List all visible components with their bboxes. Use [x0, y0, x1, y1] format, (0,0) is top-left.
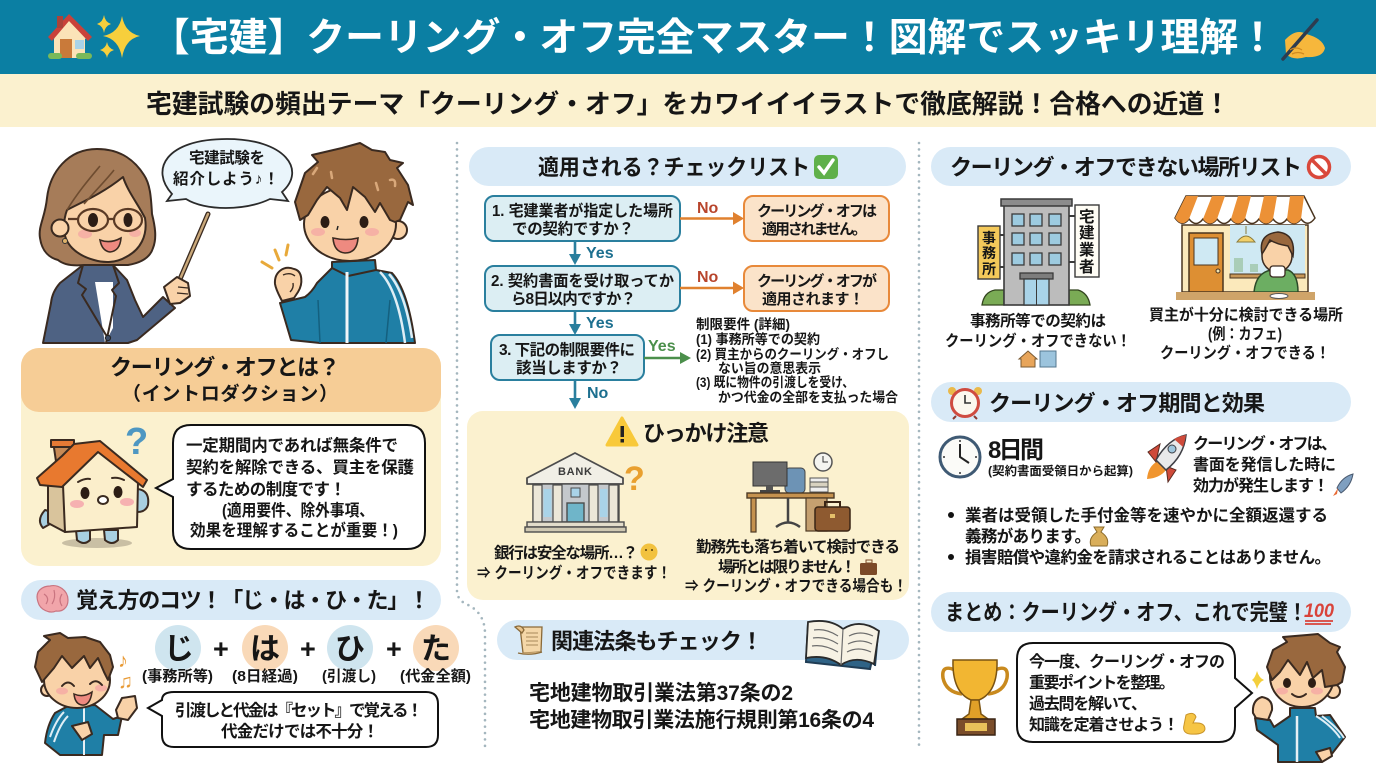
text: cafe can cool off: 買主が十分に検討できる場所 — [1149, 305, 1343, 324]
dotted column dividers — [457, 143, 919, 747]
text: workplace trap: ⇒ クーリング・オフできる場合も！ — [685, 576, 907, 595]
icon: house — [48, 14, 92, 59]
arrow labels: No — [697, 269, 719, 286]
title text: 【宅建】クーリング・オフ完全マスター！図解でスッキリ理解！ — [151, 17, 1277, 60]
heading: mnemonic — [21, 580, 441, 620]
text: law references: 宅地建物取引業法第37条の2 — [529, 682, 793, 705]
question 1: 1. 宅建業者が指定した場所 — [492, 201, 673, 220]
speech bubble: review: 今一度、クーリング・オフの — [1029, 652, 1225, 671]
sign: broker: 者 — [1079, 258, 1095, 276]
mnemonic: ji + ha + hi + ta: (代金全額) — [400, 667, 471, 685]
character: teacher — [40, 149, 208, 343]
character: singing student: ♫ — [118, 671, 133, 693]
speech bubble: definition — [156, 425, 425, 549]
question 3: 該当しますか？ — [516, 359, 622, 377]
result: not applicable — [744, 196, 889, 241]
icon: sparkles — [97, 15, 140, 58]
icon: office desk — [747, 453, 850, 532]
panel heading: クーリング・オフとは？ — [110, 355, 340, 380]
text: bank trap — [477, 543, 671, 582]
text: effective on sending: 書面を発信した時に — [1193, 455, 1336, 474]
result: applicable: 適用されます！ — [762, 290, 864, 308]
character: student — [262, 143, 415, 343]
speech bubble: introduce: 宅建試験を — [189, 148, 265, 167]
icon: wall clock — [940, 437, 980, 477]
heading: related law: 関連法条もチェック！ — [551, 629, 763, 654]
character: confident student — [1252, 634, 1345, 762]
panel: trap warning: ひっかけ注意 — [643, 421, 769, 446]
heading: related law — [497, 620, 909, 660]
speech bubble: definition: するための制度です！ — [186, 480, 346, 499]
arrows: down — [569, 241, 581, 409]
subtitle band: 宅建試験の頻出テーマ「クーリング・オフ」をカワイイイラストで徹底解説！合格への近道！ — [146, 89, 1230, 119]
text: bank trap: 銀行は安全な場所…？ — [494, 543, 638, 562]
icon: prohibited — [1308, 156, 1330, 178]
mnemonic: ji + ha + hi + ta: じ — [164, 633, 194, 666]
text: cafe can cool off — [1149, 305, 1343, 362]
title banner — [0, 0, 1376, 74]
text: workplace trap: 勤務先も落ち着いて検討できる — [696, 537, 900, 556]
text: office cannot cool off: 事務所等での契約は — [970, 311, 1106, 330]
text: bank trap: ⇒ クーリング・オフできます！ — [477, 563, 671, 582]
text: eight days — [988, 437, 1133, 478]
heading: checklist: 適用される？チェックリスト — [538, 155, 810, 180]
arrow: yes to detail — [644, 352, 691, 364]
mnemonic: ji + ha + hi + ta — [142, 625, 471, 685]
arrow labels: No — [697, 200, 719, 217]
restriction details: (2) 買主からのクーリング・オフし — [696, 346, 889, 362]
restriction details: かつ代金の全部を支払った場合 — [718, 389, 898, 405]
icon: bank: BANK — [558, 466, 592, 478]
text: workplace trap: 場所とは限りません！ — [718, 558, 856, 576]
icon: cafe — [1175, 196, 1315, 300]
restriction details: (3) 既に物件の引渡しを受け、 — [696, 374, 854, 390]
icon: writing hand — [1283, 20, 1325, 59]
icon: rocket — [1147, 435, 1186, 482]
list: refund and no damages — [948, 505, 1331, 567]
list: refund and no damages: 損害賠償や違約金を請求されることはありません。 — [965, 547, 1331, 567]
text: effective on sending: クーリング・オフは、 — [1193, 434, 1337, 453]
speech bubble: definition: (適用要件、除外事項、 — [222, 501, 374, 520]
text: office cannot cool off: クーリング・オフできない！ — [945, 331, 1131, 350]
mnemonic: ji + ha + hi + ta: + — [213, 634, 229, 664]
speech bubble: review: 重要ポイントを整理。 — [1029, 674, 1175, 692]
text: cafe can cool off: クーリング・オフできる！ — [1160, 343, 1330, 362]
question 3: 3. 下記の制限要件に — [499, 341, 635, 359]
result: not applicable: 適用されません。 — [762, 220, 867, 238]
question 2 — [485, 266, 680, 311]
sign: broker: 建 — [1079, 224, 1095, 242]
icon: small rocket — [1333, 474, 1353, 496]
speech bubble: review — [1017, 643, 1252, 742]
icon: check mark — [814, 155, 838, 179]
icon: bank: ? — [624, 460, 645, 498]
result: applicable — [744, 266, 889, 311]
arrow labels — [586, 200, 719, 402]
icon: alarm clock — [948, 387, 982, 419]
question 1 — [485, 196, 680, 241]
arrow labels: No — [587, 385, 609, 402]
sign: office: 務 — [982, 245, 996, 261]
list: refund and no damages: 業者は受領した手付金等を速やかに全額返還する — [965, 505, 1328, 525]
restriction details: 制限要件 (詳細) — [696, 316, 790, 332]
heading: period and effect: クーリング・オフ期間と効果 — [989, 391, 1265, 416]
icon: warning — [607, 418, 637, 445]
mnemonic: ji + ha + hi + ta: + — [386, 634, 402, 664]
heading: summary — [931, 592, 1351, 632]
sign: broker: 宅 — [1079, 207, 1095, 226]
panel: trap warning — [467, 411, 909, 600]
icon: money bag — [1090, 527, 1108, 546]
heading: checklist — [469, 147, 906, 186]
icon: open book — [806, 621, 879, 669]
text: cafe can cool off: (例：カフェ) — [1208, 325, 1282, 343]
text: workplace trap — [685, 537, 907, 595]
speech bubble: definition: 効果を理解することが重要！) — [190, 520, 398, 540]
speech bubble: introduce — [162, 139, 292, 208]
mnemonic: ji + ha + hi + ta: た — [421, 633, 451, 666]
speech bubble: set tip: 引渡しと代金は『セット』で覚える！ — [175, 700, 423, 720]
icon: scroll — [515, 626, 542, 654]
text: law references: 宅地建物取引業法施行規則第16条の4 — [529, 709, 874, 732]
sign: office: 所 — [982, 261, 996, 277]
mnemonic: ji + ha + hi + ta: (事務所等) — [142, 667, 213, 685]
restriction details: (1) 事務所等での契約 — [696, 331, 820, 347]
arrow labels: Yes — [586, 245, 614, 262]
character: singing student: ♪ — [118, 650, 128, 672]
list: refund and no damages: 義務があります。 — [965, 526, 1091, 546]
heading: period and effect — [931, 382, 1351, 422]
question 2: ら8日以内ですか？ — [511, 290, 636, 308]
speech bubble: set tip: 代金だけでは不十分！ — [221, 721, 379, 741]
arrow labels: Yes — [648, 338, 676, 355]
character: worried house — [37, 421, 148, 548]
text: effective on sending: 効力が発生します！ — [1193, 476, 1329, 495]
heading: not eligible places: クーリング・オフできない場所リスト — [950, 155, 1302, 180]
icon: brain — [37, 586, 68, 612]
speech bubble: review: 知識を定着させよう！ — [1029, 715, 1179, 734]
sign: broker: 業 — [1079, 241, 1095, 259]
speech bubble: definition: 契約を解除できる、買主を保護 — [186, 458, 414, 477]
text: effective on sending — [1193, 434, 1353, 496]
restriction details: ない旨の意思表示 — [718, 360, 821, 376]
panel heading — [21, 348, 441, 412]
mnemonic: ji + ha + hi + ta: + — [300, 634, 316, 664]
mnemonic: ji + ha + hi + ta: ひ — [335, 633, 365, 666]
arrows: No right — [680, 212, 744, 294]
heading: summary: まとめ：クーリング・オフ、これで完璧！ — [945, 600, 1307, 625]
restriction details — [696, 316, 898, 405]
text: law references — [529, 682, 874, 732]
mnemonic: ji + ha + hi + ta: (引渡し) — [322, 667, 376, 685]
text: eight days: (契約書面受領日から起算) — [988, 463, 1133, 478]
character: worried house: ? — [125, 421, 148, 463]
speech bubble: definition: 一定期間内であれば無条件で — [186, 435, 398, 455]
question 1: での契約ですか？ — [512, 219, 634, 238]
sign: broker — [1075, 205, 1099, 277]
icon: trophy — [943, 660, 1007, 735]
icon: office building — [978, 199, 1099, 305]
speech bubble: introduce: 紹介しよう♪！ — [173, 170, 279, 188]
result: not applicable: クーリング・オフは — [757, 202, 877, 220]
arrow labels: Yes — [586, 315, 614, 332]
question 2: 2. 契約書面を受け取ってか — [491, 271, 674, 290]
text: eight days: 8日間 — [988, 437, 1044, 464]
icon: muscle — [1184, 713, 1205, 734]
text: office cannot cool off — [945, 311, 1131, 367]
question 3 — [491, 335, 644, 380]
speech bubble: set tip — [148, 692, 438, 747]
heading: mnemonic: 覚え方のコツ！「じ・は・ひ・た」！ — [76, 588, 430, 613]
sign: office: 事 — [982, 230, 996, 246]
subtitle band — [0, 74, 1376, 127]
sign: office — [978, 226, 1000, 279]
character: singing student — [35, 633, 137, 755]
mnemonic: ji + ha + hi + ta: は — [250, 633, 280, 666]
mnemonic: ji + ha + hi + ta: (8日経過) — [232, 668, 298, 685]
icon: 100: 100 — [1304, 601, 1334, 622]
icon: bank — [525, 453, 645, 532]
panel: what is cooling-off — [21, 348, 441, 566]
heading: not eligible places — [931, 147, 1351, 186]
speech bubble: review: 過去問を解いて、 — [1029, 694, 1147, 713]
panel heading: （イントロダクション） — [122, 382, 338, 405]
result: applicable: クーリング・オフが — [757, 272, 877, 290]
flowchart — [485, 196, 898, 409]
